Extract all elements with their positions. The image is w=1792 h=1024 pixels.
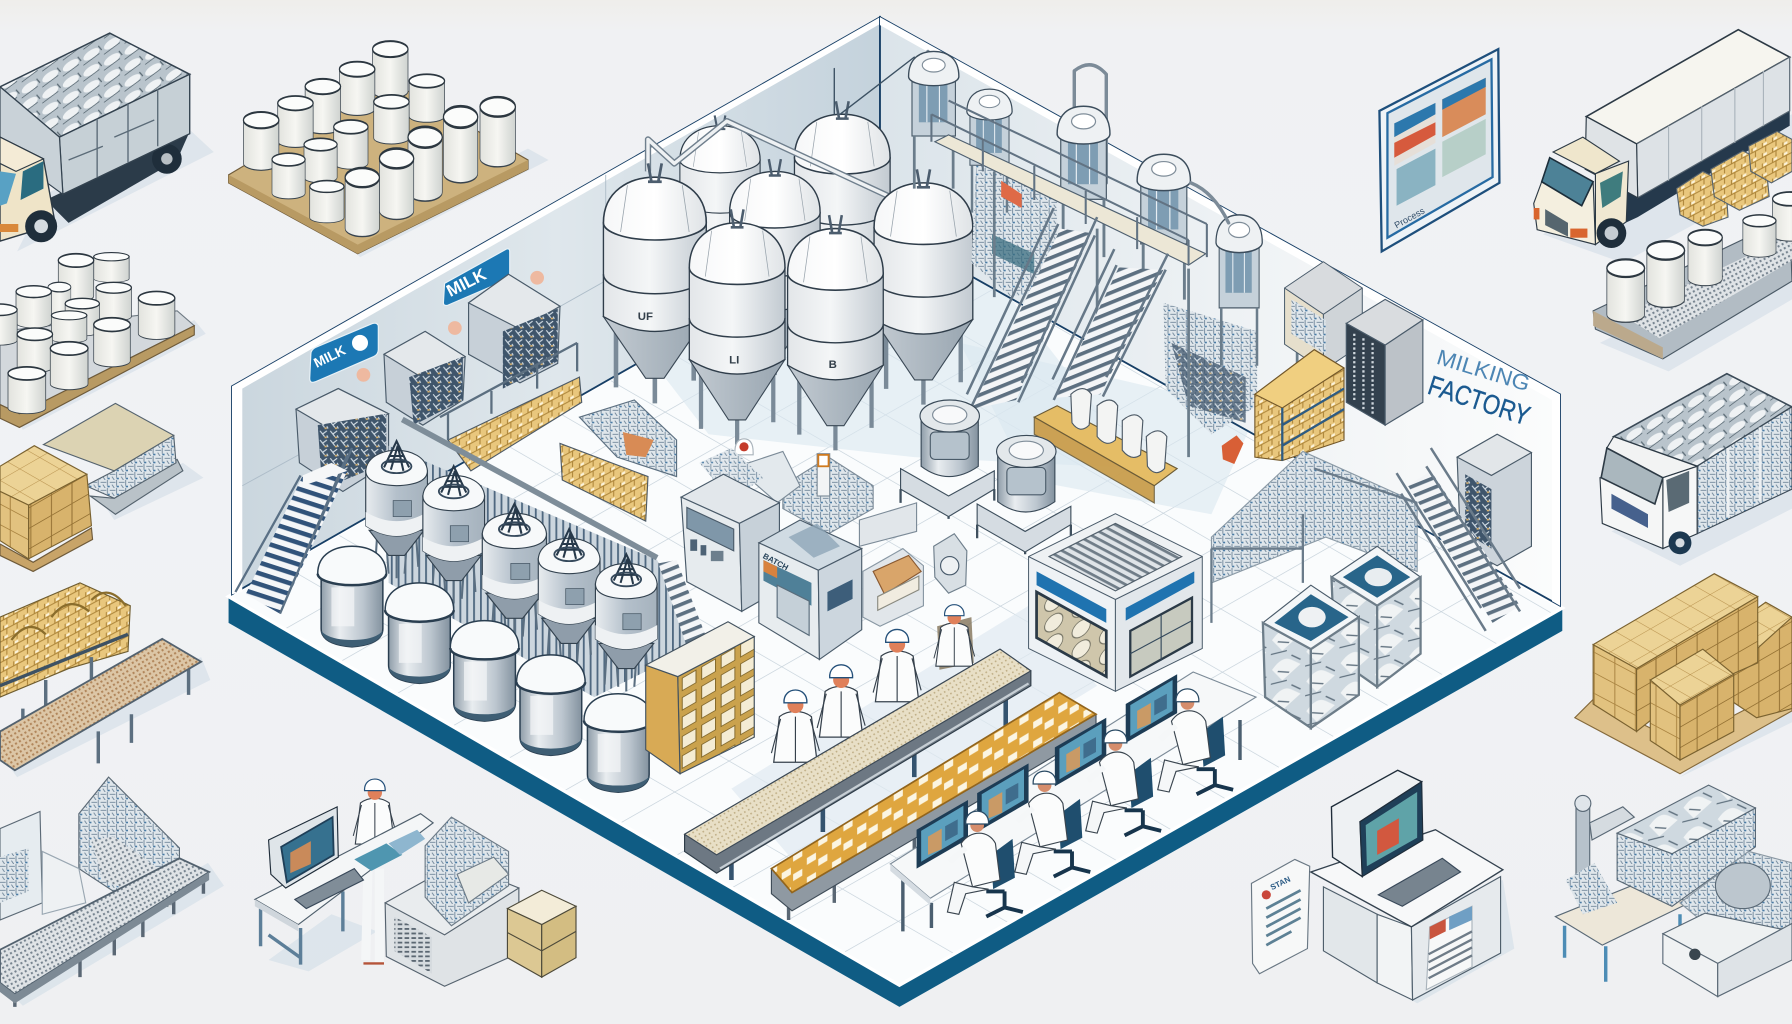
right truck — [1600, 374, 1792, 566]
wall title: milking factory: FACTORY — [1424, 369, 1534, 431]
bread racks, left — [440, 343, 677, 521]
operators — [947, 689, 1233, 917]
silo front row: UF — [638, 311, 653, 323]
overhead pipes and back silos — [603, 57, 973, 450]
left wall machines — [296, 271, 560, 491]
top right truck — [1534, 30, 1792, 263]
right side mezzanine machines — [1211, 434, 1531, 631]
wall title: milking factory — [1424, 344, 1534, 431]
right wall — [880, 17, 1560, 606]
conveyor belt — [685, 649, 1031, 880]
bag filling line — [1034, 389, 1243, 503]
jars pallet left — [0, 253, 206, 430]
gold tray conveyor — [771, 693, 1096, 920]
silo front row — [603, 163, 973, 450]
process tanks row — [366, 441, 705, 691]
gold product rack — [646, 622, 754, 774]
centre packaging machines: BATCH — [761, 552, 790, 572]
lab workstation — [255, 779, 433, 971]
lab equipment — [385, 817, 519, 986]
right jars on conveyor — [1593, 192, 1792, 371]
sign: milk right — [443, 249, 510, 305]
machines: upper right wall — [1255, 262, 1423, 461]
document stand — [1251, 859, 1310, 974]
right crates pallet — [1575, 574, 1792, 777]
catwalk — [935, 135, 1206, 265]
wall title: milking factory: MILKING — [1434, 344, 1533, 396]
stairs: centre — [967, 208, 1168, 411]
centre packaging machines — [681, 439, 967, 659]
stairs: left — [235, 448, 352, 614]
steel storage tanks row — [318, 546, 653, 792]
conveyor left — [0, 583, 210, 777]
boxes pallet left — [0, 403, 203, 571]
jars pallet top — [229, 41, 549, 257]
bottom right machine — [1555, 785, 1792, 997]
machine conveyor bottom left — [0, 777, 224, 1007]
sign: milk left: MILK — [311, 342, 348, 371]
glass cabinets — [1263, 546, 1421, 728]
silo front row: B — [829, 359, 837, 371]
upper process towers and catwalks — [909, 51, 1297, 457]
sign: milk left — [310, 323, 378, 382]
factory floor base — [229, 225, 1562, 1007]
silo front row: LI — [729, 354, 739, 366]
pipe bank behind tanks — [389, 446, 697, 697]
monitors — [917, 674, 1177, 869]
computer desk — [1311, 770, 1514, 1003]
poster — [1379, 49, 1499, 251]
mixer vessels — [901, 400, 1071, 554]
transfer pipe over tanks — [402, 419, 657, 558]
operator desk — [890, 672, 1256, 931]
standing workers — [771, 605, 975, 762]
poster: Process — [1393, 205, 1427, 230]
sign: milk right: MILK — [443, 264, 490, 301]
document stand: STAN — [1269, 875, 1292, 892]
left wall — [232, 17, 880, 594]
oven unit — [1029, 514, 1202, 691]
top left truck — [0, 33, 214, 251]
cardboard boxes — [507, 890, 576, 977]
silo back row — [680, 101, 890, 375]
